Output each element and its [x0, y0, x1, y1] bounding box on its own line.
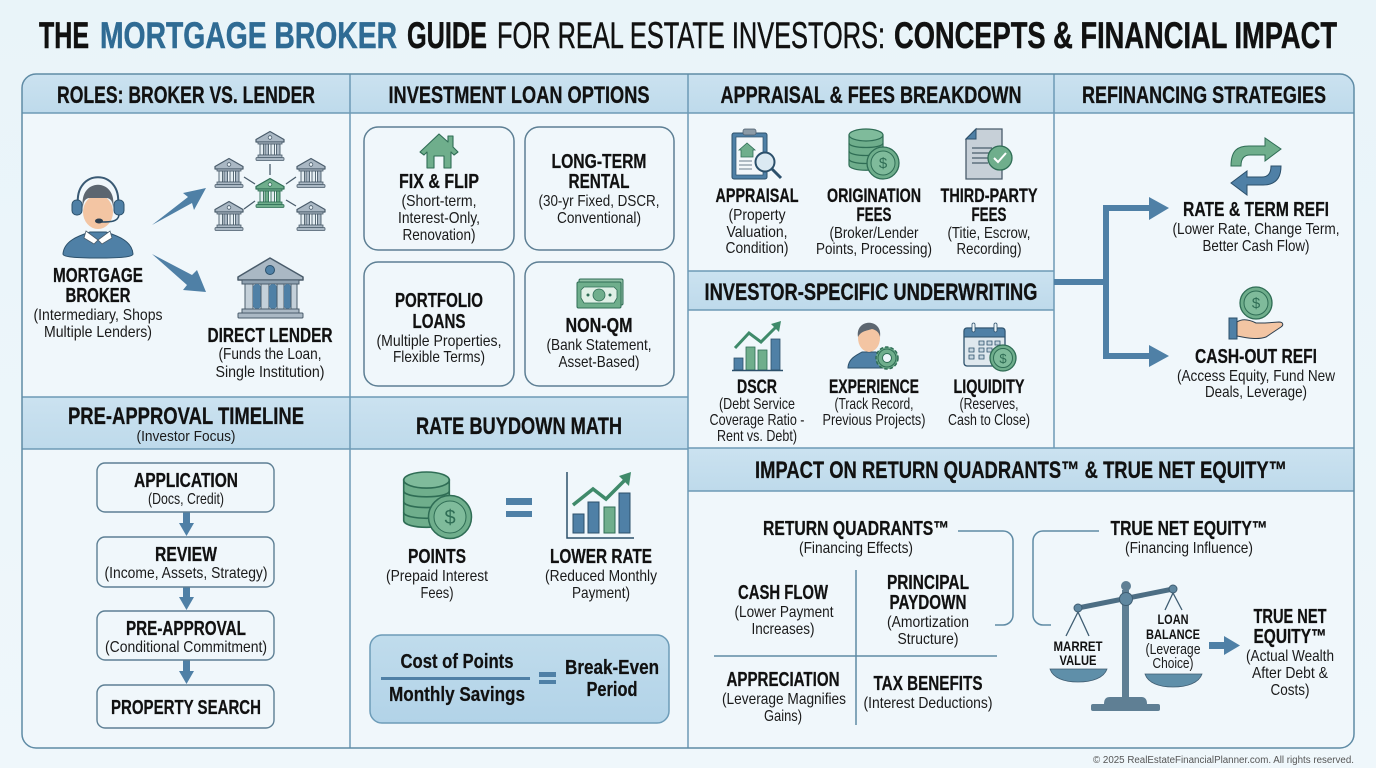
callout: break-even formula — [370, 635, 669, 723]
label: loan balance: (Leverage — [1146, 641, 1200, 658]
item: appraisal: Condition) — [726, 240, 788, 257]
step: property search — [97, 685, 274, 728]
text: points: Fees) — [420, 585, 454, 602]
text: true net equity result: After Debt & — [1252, 665, 1328, 682]
label: loan balance: LOAN — [1158, 611, 1188, 627]
heading: return quadrants — [763, 518, 949, 557]
card: fix and flip: FIX & FLIP — [399, 171, 479, 193]
panel: refinancing strategies — [1054, 138, 1340, 401]
heading: pre-approval timeline: (Investor Focus) — [136, 428, 236, 445]
step: review: (Income, Assets, Strategy) — [104, 565, 268, 582]
item: DSCR — [710, 321, 804, 445]
step: pre-approval — [97, 611, 274, 660]
text: lower rate: (Reduced Monthly — [545, 568, 657, 585]
arrow: branch connector — [1054, 197, 1169, 367]
panel: investment loan options — [364, 127, 674, 386]
item: origination fees: FEES — [856, 205, 892, 226]
panel: roles — [34, 132, 333, 381]
text: points: (Prepaid Interest — [386, 568, 488, 585]
card: portfolio loans: PORTFOLIO — [395, 290, 483, 312]
text: rate and term refi: Better Cash Flow) — [1202, 238, 1310, 255]
panel: investor underwriting — [710, 321, 1030, 445]
heading: true net equity: (Financing Influence) — [1125, 540, 1253, 557]
step: application — [97, 463, 274, 512]
card: fix and flip: Renovation) — [402, 227, 476, 244]
label: loan balance: Choice) — [1152, 655, 1194, 672]
item: third-party fees: Recording) — [956, 241, 1022, 258]
quadrant: cash flow — [734, 582, 834, 638]
arrow: review to pre-approval — [179, 587, 194, 610]
panel: return quadrants — [714, 518, 1013, 725]
quadrant: principal paydown: Structure) — [898, 631, 958, 648]
item: origination fees: $ — [879, 155, 888, 172]
text: cash-out refi: CASH-OUT REFI — [1195, 346, 1317, 368]
quadrant: tax benefits: TAX BENEFITS — [874, 673, 982, 695]
text: direct lender: Single Institution) — [216, 364, 324, 381]
icon: refresh arrows — [1231, 138, 1281, 195]
item: origination fees: ORIGINATION — [827, 186, 921, 207]
step: application: APPLICATION — [134, 470, 238, 492]
item: third-party fees: (Titie, Escrow, — [948, 225, 1030, 242]
label: market value: VALUE — [1060, 652, 1096, 668]
arrow: broker to multiple lenders — [152, 188, 206, 225]
text: true net equity result: (Actual Wealth — [1246, 648, 1334, 665]
card: non-QM — [525, 262, 674, 386]
card: long-term rental: RENTAL — [568, 171, 630, 193]
card: portfolio loans: (Multiple Properties, — [376, 333, 502, 350]
item: origination fees: (Broker/Lender — [830, 225, 919, 242]
text: true net equity result — [1246, 606, 1334, 699]
text: mortgage broker: MORTGAGE — [53, 265, 143, 287]
step: application: (Docs, Credit) — [148, 491, 224, 508]
icon: points coin stack — [404, 472, 472, 538]
label: market value — [1054, 638, 1103, 668]
item: DSCR: Coverage Ratio - — [710, 412, 804, 429]
item: origination fees — [816, 129, 932, 258]
text: mortgage broker: BROKER — [66, 285, 131, 307]
title: GUIDE — [407, 15, 487, 56]
text: lower rate — [545, 546, 657, 602]
heading: true net equity: TRUE NET EQUITY™ — [1110, 518, 1268, 540]
heading: investor underwriting: INVESTOR-SPECIFIC UNDERWRITING — [704, 279, 1038, 306]
text: true net equity result: TRUE NET — [1254, 606, 1326, 628]
card: non-QM: Asset-Based) — [558, 354, 640, 371]
arrow: broker to direct lender — [152, 254, 206, 292]
card: non-QM: NON-QM — [566, 315, 632, 337]
text: mortgage broker — [34, 265, 162, 341]
card: fix and flip: (Short-term, — [402, 193, 476, 210]
heading: return quadrants: (Financing Effects) — [799, 540, 913, 557]
item: appraisal — [716, 129, 799, 257]
item: liquidity: Cash to Close) — [948, 412, 1030, 429]
card: long-term rental — [525, 127, 674, 250]
card: long-term rental: (30-yr Fixed, DSCR, — [538, 193, 660, 210]
text: mortgage broker: Multiple Lenders) — [44, 324, 152, 341]
item: appraisal: (Property — [728, 207, 786, 224]
bracket: true net equity — [1033, 531, 1099, 625]
text: points — [386, 546, 488, 602]
text: rate and term refi: (Lower Rate, Change Term, — [1172, 221, 1340, 238]
quadrant: principal paydown: PAYDOWN — [890, 592, 966, 614]
step: review: REVIEW — [155, 544, 217, 566]
heading: appraisal and fees: APPRAISAL & FEES BREAKDOWN — [720, 82, 1022, 109]
label: loan balance — [1146, 611, 1200, 672]
quadrant: principal paydown: PRINCIPAL — [887, 572, 969, 594]
icon: coin over hand — [1229, 287, 1283, 339]
quadrant: tax benefits — [864, 673, 992, 712]
quadrant: appreciation: (Leverage Magnifies — [722, 691, 846, 708]
text: direct lender — [208, 325, 333, 381]
item: liquidity: (Reserves, — [960, 396, 1018, 413]
text: lower rate: LOWER RATE — [550, 546, 652, 568]
panel: appraisal and fees — [716, 129, 1038, 258]
item: liquidity: $ — [999, 351, 1007, 366]
item: experience: Previous Projects) — [822, 412, 926, 429]
item: DSCR: (Debt Service — [719, 396, 795, 413]
quadrant: cash flow: Increases) — [752, 621, 814, 638]
card: fix and flip — [364, 127, 514, 250]
card: fix and flip: Interest-Only, — [398, 210, 480, 227]
bracket: return quadrants — [958, 531, 1013, 625]
text: direct lender: (Funds the Loan, — [218, 346, 322, 363]
item: DSCR: DSCR — [737, 377, 777, 398]
item: experience — [822, 323, 926, 429]
panel: rate buydown math — [370, 472, 669, 723]
item: liquidity — [948, 323, 1030, 429]
icon: points coin stack: $ — [444, 507, 456, 529]
text: lower rate: Payment) — [572, 585, 630, 602]
item: origination fees: Points, Processing) — [816, 241, 932, 258]
text: direct lender: DIRECT LENDER — [208, 325, 333, 347]
text: rate and term refi: RATE & TERM REFI — [1183, 199, 1329, 221]
card: portfolio loans: LOANS — [412, 311, 466, 333]
icon: coin over hand: $ — [1252, 295, 1261, 312]
quadrant: cash flow: CASH FLOW — [738, 582, 828, 604]
icon: direct lender bank — [238, 258, 303, 318]
text: cash-out refi: Deals, Leverage) — [1205, 384, 1307, 401]
item: experience: (Track Record, — [834, 396, 914, 413]
panel: pre-approval timeline — [97, 463, 274, 728]
item: DSCR: Rent vs. Debt) — [717, 428, 797, 445]
label: market value: MARRET — [1054, 638, 1103, 654]
icon: lender network — [215, 132, 325, 230]
item: appraisal: APPRAISAL — [716, 186, 799, 207]
quadrant: tax benefits: (Interest Deductions) — [864, 695, 992, 712]
text: mortgage broker: (Intermediary, Shops — [34, 307, 162, 324]
text: true net equity result: Costs) — [1270, 682, 1310, 699]
icon: equals sign — [506, 498, 532, 517]
callout: break-even formula: Break-Even — [565, 657, 659, 679]
heading: rate buydown math: RATE BUYDOWN MATH — [416, 413, 622, 440]
label: loan balance: BALANCE — [1146, 626, 1200, 642]
card: portfolio loans — [364, 262, 514, 386]
icon: mortgage broker with headset — [63, 177, 133, 258]
quadrant: cash flow: (Lower Payment — [734, 604, 834, 621]
card: long-term rental: Conventional) — [557, 210, 641, 227]
quadrant: appreciation — [722, 669, 846, 725]
quadrant: appreciation: Gains) — [764, 708, 802, 725]
text: rate and term refi — [1172, 199, 1340, 255]
arrow: pre-approval to search — [179, 660, 194, 684]
item: experience: EXPERIENCE — [829, 377, 919, 398]
panel: true net equity — [1033, 518, 1334, 711]
quadrant: principal paydown: (Amortization — [887, 614, 969, 631]
card: long-term rental: LONG-TERM — [552, 151, 646, 173]
quadrant: principal paydown — [887, 572, 969, 648]
quadrant: appreciation: APPRECIATION — [726, 669, 840, 691]
card: portfolio loans: Flexible Terms) — [393, 349, 485, 366]
text: cash-out refi: (Access Equity, Fund New — [1177, 368, 1335, 385]
callout: break-even formula: Cost of Points — [400, 651, 514, 673]
arrow: application to review — [179, 512, 194, 536]
title: THE — [39, 15, 89, 56]
card: non-QM: (Bank Statement, — [546, 337, 652, 354]
title: MORTGAGE BROKER — [100, 15, 397, 56]
arrow: scale to true net equity — [1209, 636, 1240, 655]
heading: return quadrants: RETURN QUADRANTS™ — [763, 518, 949, 540]
footer copyright: © 2025 RealEstateFinancialPlanner.com. All rights reserved. — [1093, 755, 1354, 766]
text: cash-out refi — [1177, 346, 1335, 401]
callout: break-even formula: Monthly Savings — [389, 684, 525, 706]
item: liquidity: LIQUIDITY — [954, 377, 1025, 398]
text: points: POINTS — [408, 546, 466, 568]
callout: break-even formula: Period — [586, 679, 638, 701]
quadrant grid — [714, 570, 997, 725]
title — [39, 15, 1337, 56]
title: FOR REAL ESTATE INVESTORS: — [497, 15, 885, 56]
item: third-party fees: THIRD-PARTY — [940, 186, 1038, 207]
step: pre-approval: (Conditional Commitment) — [105, 639, 267, 656]
icon: lower rate chart — [567, 472, 634, 538]
item: third-party fees — [940, 129, 1038, 258]
heading: investment loan options: INVESTMENT LOAN OPTIONS — [388, 82, 650, 109]
heading: true net equity — [1110, 518, 1268, 557]
step: property search: PROPERTY SEARCH — [111, 697, 261, 719]
step: pre-approval: PRE-APPROVAL — [126, 618, 246, 640]
heading: pre-approval timeline: PRE-APPROVAL TIMELINE — [68, 403, 304, 430]
icon: balance scale — [1050, 581, 1202, 711]
heading: roles: ROLES: BROKER VS. LENDER — [57, 82, 315, 109]
item: appraisal: Valuation, — [726, 224, 788, 241]
item: third-party fees: FEES — [972, 205, 1006, 226]
text: true net equity result: EQUITY™ — [1254, 626, 1326, 648]
step: review — [97, 537, 274, 587]
heading: pre-approval timeline — [68, 403, 304, 445]
